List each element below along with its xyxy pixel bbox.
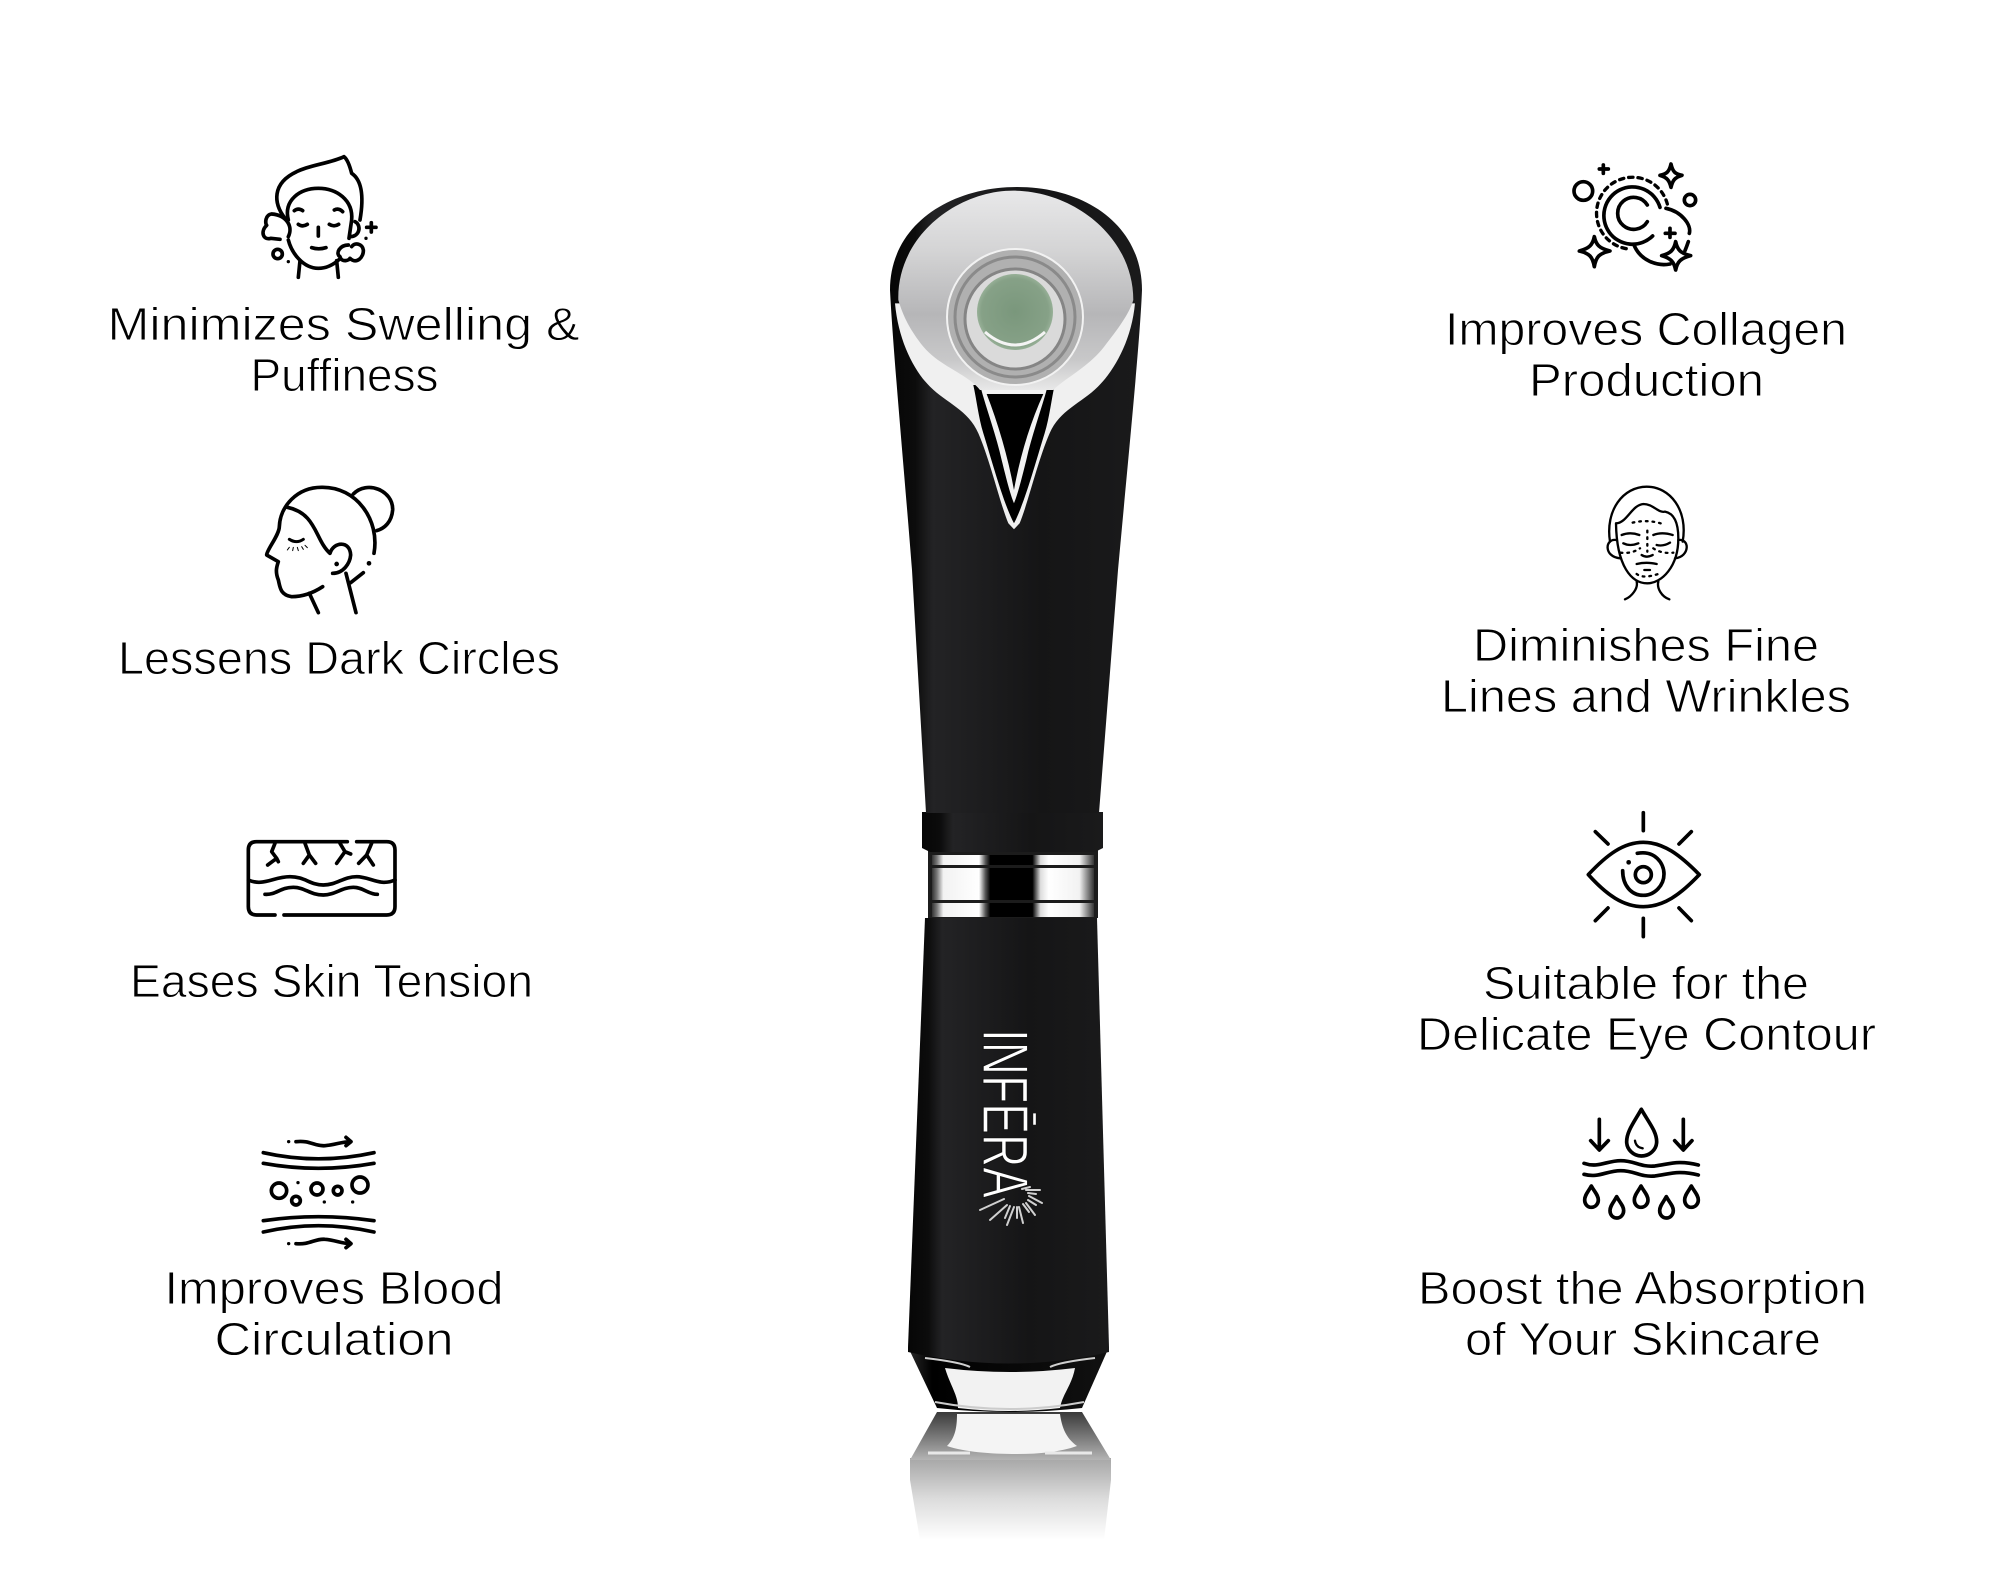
right item 1: [1445, 164, 1847, 406]
icon: eye: [1588, 813, 1699, 937]
label: Diminishes Fine: [1473, 619, 1819, 671]
label: Lessens Dark Circles: [118, 632, 560, 684]
label line 2: Puffiness: [250, 349, 438, 401]
icon: absorption drops: [1584, 1109, 1698, 1218]
label line 2: of Your Skincare: [1465, 1313, 1821, 1365]
icon: collagen: [1574, 164, 1696, 270]
product: INFERA device: [890, 187, 1142, 1540]
icon: face with foam: [263, 157, 376, 277]
right item 3: [1417, 813, 1876, 1060]
icon: skin layers: [248, 842, 395, 915]
collar: [922, 812, 1103, 852]
chrome teardrop head: [895, 191, 1135, 529]
label line 2: Delicate Eye Contour: [1417, 1008, 1876, 1060]
right item 2: [1441, 487, 1851, 722]
chrome ring: [928, 850, 1098, 918]
device lower body: [908, 918, 1109, 1364]
label: Improves Blood: [164, 1262, 504, 1314]
device reflection: [910, 1412, 1111, 1540]
left item 4: [164, 1137, 504, 1365]
label: Improves Collagen: [1445, 303, 1847, 355]
icon: woman profile with bun: [267, 487, 393, 613]
device upper body: [890, 187, 1142, 813]
left item 2: [118, 487, 560, 684]
label: Minimizes Swelling &: [108, 298, 580, 350]
device base: [908, 1347, 1109, 1412]
label: Boost the Absorption: [1418, 1262, 1867, 1314]
left item 3: [130, 842, 533, 1007]
brand name: INFĒRA: [969, 1029, 1042, 1198]
right item 4: [1418, 1109, 1867, 1365]
label: Suitable for the: [1483, 957, 1809, 1009]
label line 2: Lines and Wrinkles: [1441, 670, 1851, 722]
lens with green stone: [947, 249, 1083, 385]
label line 2: Circulation: [214, 1313, 454, 1365]
brand starburst: [980, 1187, 1042, 1225]
label: Eases Skin Tension: [130, 955, 533, 1007]
left item 1: [108, 157, 580, 401]
icon: face with dotted lines: [1608, 487, 1687, 599]
icon: blood flow: [263, 1137, 374, 1248]
label line 2: Production: [1529, 354, 1764, 406]
